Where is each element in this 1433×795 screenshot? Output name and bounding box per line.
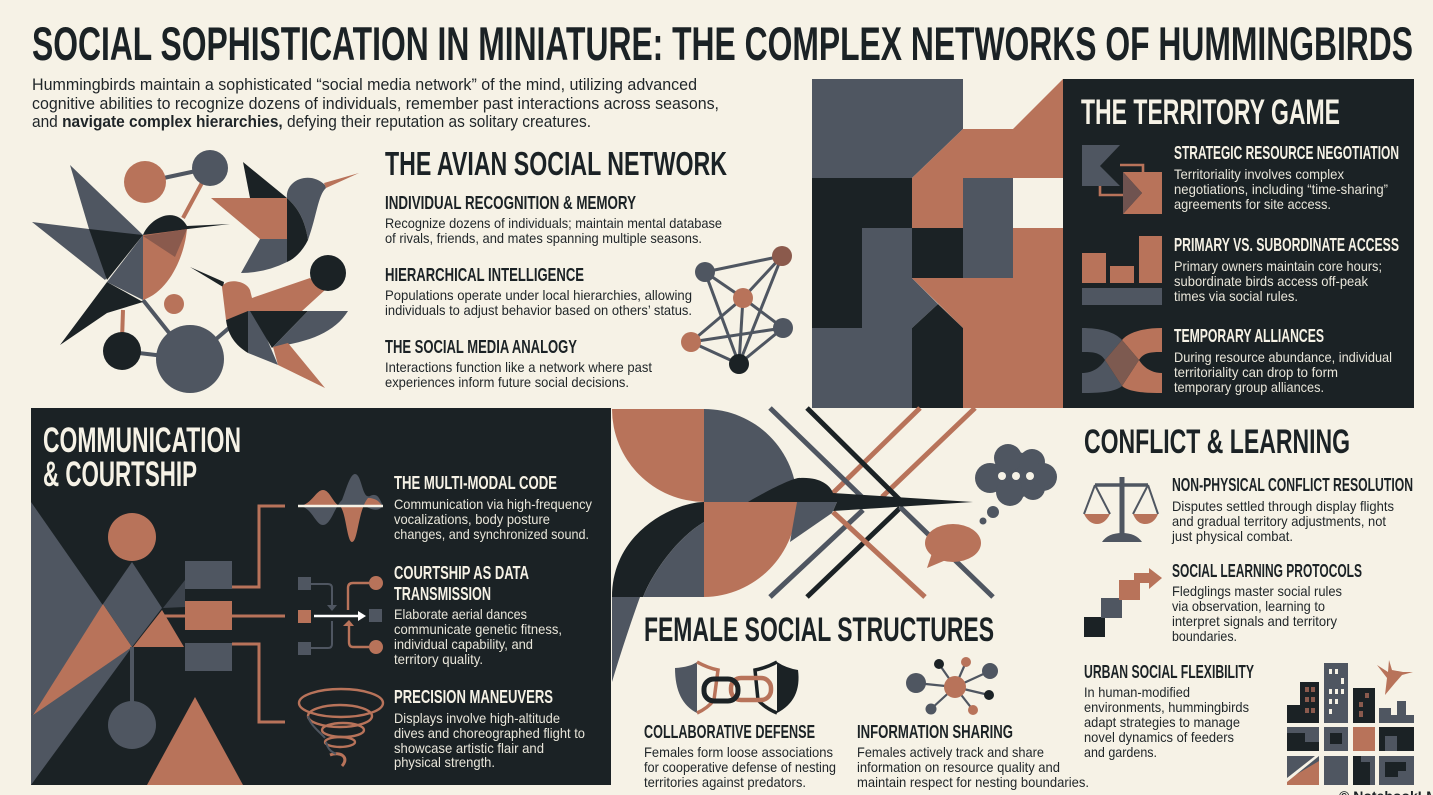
item: hierarchical intelligence: HIERARCHICAL INTELLIGENCE [385,264,584,285]
item: individual recognition: Recognize dozens of individuals; maintain mental database [385,215,722,231]
item: courtship as data transmission: Elaborate aerial dances [394,606,527,622]
item: courtship as data transmission: territory quality. [394,651,483,667]
item: individual recognition: INDIVIDUAL RECOGNITION & MEMORY [385,192,636,213]
item: collaborative defense: for cooperative defense of nesting [644,759,836,775]
item: collaborative defense [644,721,836,790]
item: social media analogy: Interactions function like a network where past [385,359,652,375]
item: courtship as data transmission: TRANSMISSION [394,583,491,604]
item: precision maneuvers: showcase artistic flair and [394,740,544,756]
icon: speech bubble [925,524,981,568]
item: strategic resource negotiation: agreements for site access. [1174,196,1331,212]
item: hierarchical intelligence: individuals to adjust behavior based on others’ status. [385,302,692,318]
heading: COMMUNICATION [43,421,241,460]
item: urban social flexibility [1084,661,1254,760]
illustration: long-beaked hummingbird with crossing lines [612,408,993,682]
item: temporary alliances: territoriality can drop to form [1174,364,1338,380]
item: courtship as data transmission [394,562,562,667]
item: information sharing: information on resource quality and [857,759,1060,775]
item: precision maneuvers [394,686,585,770]
item: urban social flexibility: novel dynamics of feeders [1084,729,1234,745]
item: strategic resource negotiation: Territoriality involves complex [1174,166,1344,182]
intro text block: Hummingbirds maintain a sophisticated “social media network” of the mind, utilizing advanced [32,75,697,94]
item: non-physical conflict resolution: just physical combat. [1171,528,1293,544]
icon: stair-step arrow [1084,568,1162,637]
item: precision maneuvers: physical strength. [394,754,495,770]
bird: left hummingbird [32,165,230,345]
heading: & COURTSHIP [43,455,197,494]
item: precision maneuvers: dives and choreographed flight to [394,725,585,741]
geometric mosaic: territory [812,79,1063,408]
item: individual recognition: of rivals, friends, and mates spanning multiple seasons. [385,230,702,246]
section: female social structures [644,611,1089,790]
item: urban social flexibility: URBAN SOCIAL FLEXIBILITY [1084,661,1254,682]
item: information sharing: INFORMATION SHARING [857,721,1013,742]
item: social learning protocols: boundaries. [1172,628,1237,644]
icon: spiral flight [299,689,383,766]
item: information sharing [857,721,1089,790]
icon: resource negotiation [1082,145,1162,214]
item: non-physical conflict resolution: Disputes settled through display flights [1172,498,1394,514]
panel: communication and courtship [31,408,611,785]
item: information sharing: Females actively track and share [857,744,1044,760]
item: hierarchical intelligence: Populations operate under local hierarchies, allowing [385,287,692,303]
item: social media analogy: THE SOCIAL MEDIA ANALOGY [385,336,577,357]
icon: information sharing hub [906,657,998,715]
item: multi-modal code: vocalizations, body posture [394,511,550,527]
icon: linked shields [675,662,799,713]
illustration: networked hummingbirds [32,150,359,393]
heading: FEMALE SOCIAL STRUCTURES [644,611,994,649]
item: primary vs subordinate access [1174,234,1399,304]
item: precision maneuvers: PRECISION MANEUVERS [394,686,553,707]
item: non-physical conflict resolution [1171,474,1413,544]
icon: sound wave [298,474,383,542]
item: multi-modal code: THE MULTI-MODAL CODE [394,472,557,493]
item: multi-modal code: Communication via high-frequency [394,496,592,512]
item: social learning protocols: Fledglings master social rules [1172,583,1342,599]
section: conflict and learning [1084,423,1414,785]
panel: the territory game [1063,79,1414,408]
item: social media analogy: experiences inform future social decisions. [385,374,629,390]
item: courtship as data transmission: COURTSHIP AS DATA [394,562,529,583]
intro text block [32,75,719,131]
item: strategic resource negotiation: negotiations, including “time-sharing” [1174,181,1388,197]
item: social media analogy [385,336,652,390]
geometric figure [31,502,285,785]
item: social learning protocols: interpret signals and territory [1172,613,1337,629]
item: hierarchical intelligence [385,264,692,318]
intro text block: cognitive abilities to recognize dozens of individuals, remember past interactions across seasons, [32,94,719,113]
item: collaborative defense: territories against predators. [644,774,806,790]
icon: thought cloud [975,444,1057,524]
item: temporary alliances: temporary group alliances. [1174,379,1324,395]
item: non-physical conflict resolution: and gradual territory adjustments, not [1172,513,1386,529]
icon: balance scale [1084,477,1158,542]
item: primary vs subordinate access: subordinate birds access off-peak [1174,273,1369,289]
icon: access bars [1082,236,1162,305]
item: urban social flexibility: and gardens. [1084,744,1157,760]
item: strategic resource negotiation [1174,142,1399,212]
icon: temporary alliance crossing [1082,328,1162,393]
heading: THE AVIAN SOCIAL NETWORK [385,145,727,182]
intro text block: and navigate complex hierarchies, defying their reputation as solitary creatures. [32,112,591,131]
item: primary vs subordinate access: Primary owners maintain core hours; [1174,258,1382,274]
item: temporary alliances [1174,325,1392,395]
item: primary vs subordinate access: times via social rules. [1174,288,1298,304]
item: urban social flexibility: environments, hummingbirds [1084,699,1249,715]
bird: lower right hummingbird [190,255,348,388]
icon: social network graph [681,246,793,374]
item: precision maneuvers: Displays involve high-altitude [394,710,560,726]
item: temporary alliances: During resource abundance, individual [1174,349,1392,365]
item: collaborative defense: Females form loose associations [644,744,833,760]
icon: data transmission flow [298,576,383,655]
item: social learning protocols [1172,560,1362,644]
item: courtship as data transmission: communicate genetic fitness, [394,621,562,637]
item: collaborative defense: COLLABORATIVE DEFENSE [644,721,815,742]
section: the avian social network [385,145,727,390]
item: social learning protocols: via observation, learning to [1172,598,1325,614]
item: courtship as data transmission: individual capability, and [394,636,533,652]
item: information sharing: maintain respect for nesting boundaries. [857,774,1089,790]
bird: upper right hummingbird [211,162,359,273]
heading [43,421,241,494]
item: multi-modal code [394,472,592,542]
item: urban social flexibility: In human-modified [1084,684,1190,700]
icon: city grid with hummingbird [1287,660,1414,785]
item: multi-modal code: changes, and synchronized sound. [394,526,589,542]
item: urban social flexibility: adapt strategies to manage [1084,714,1240,730]
item: temporary alliances: TEMPORARY ALLIANCES [1174,325,1324,346]
item: individual recognition [385,192,722,246]
